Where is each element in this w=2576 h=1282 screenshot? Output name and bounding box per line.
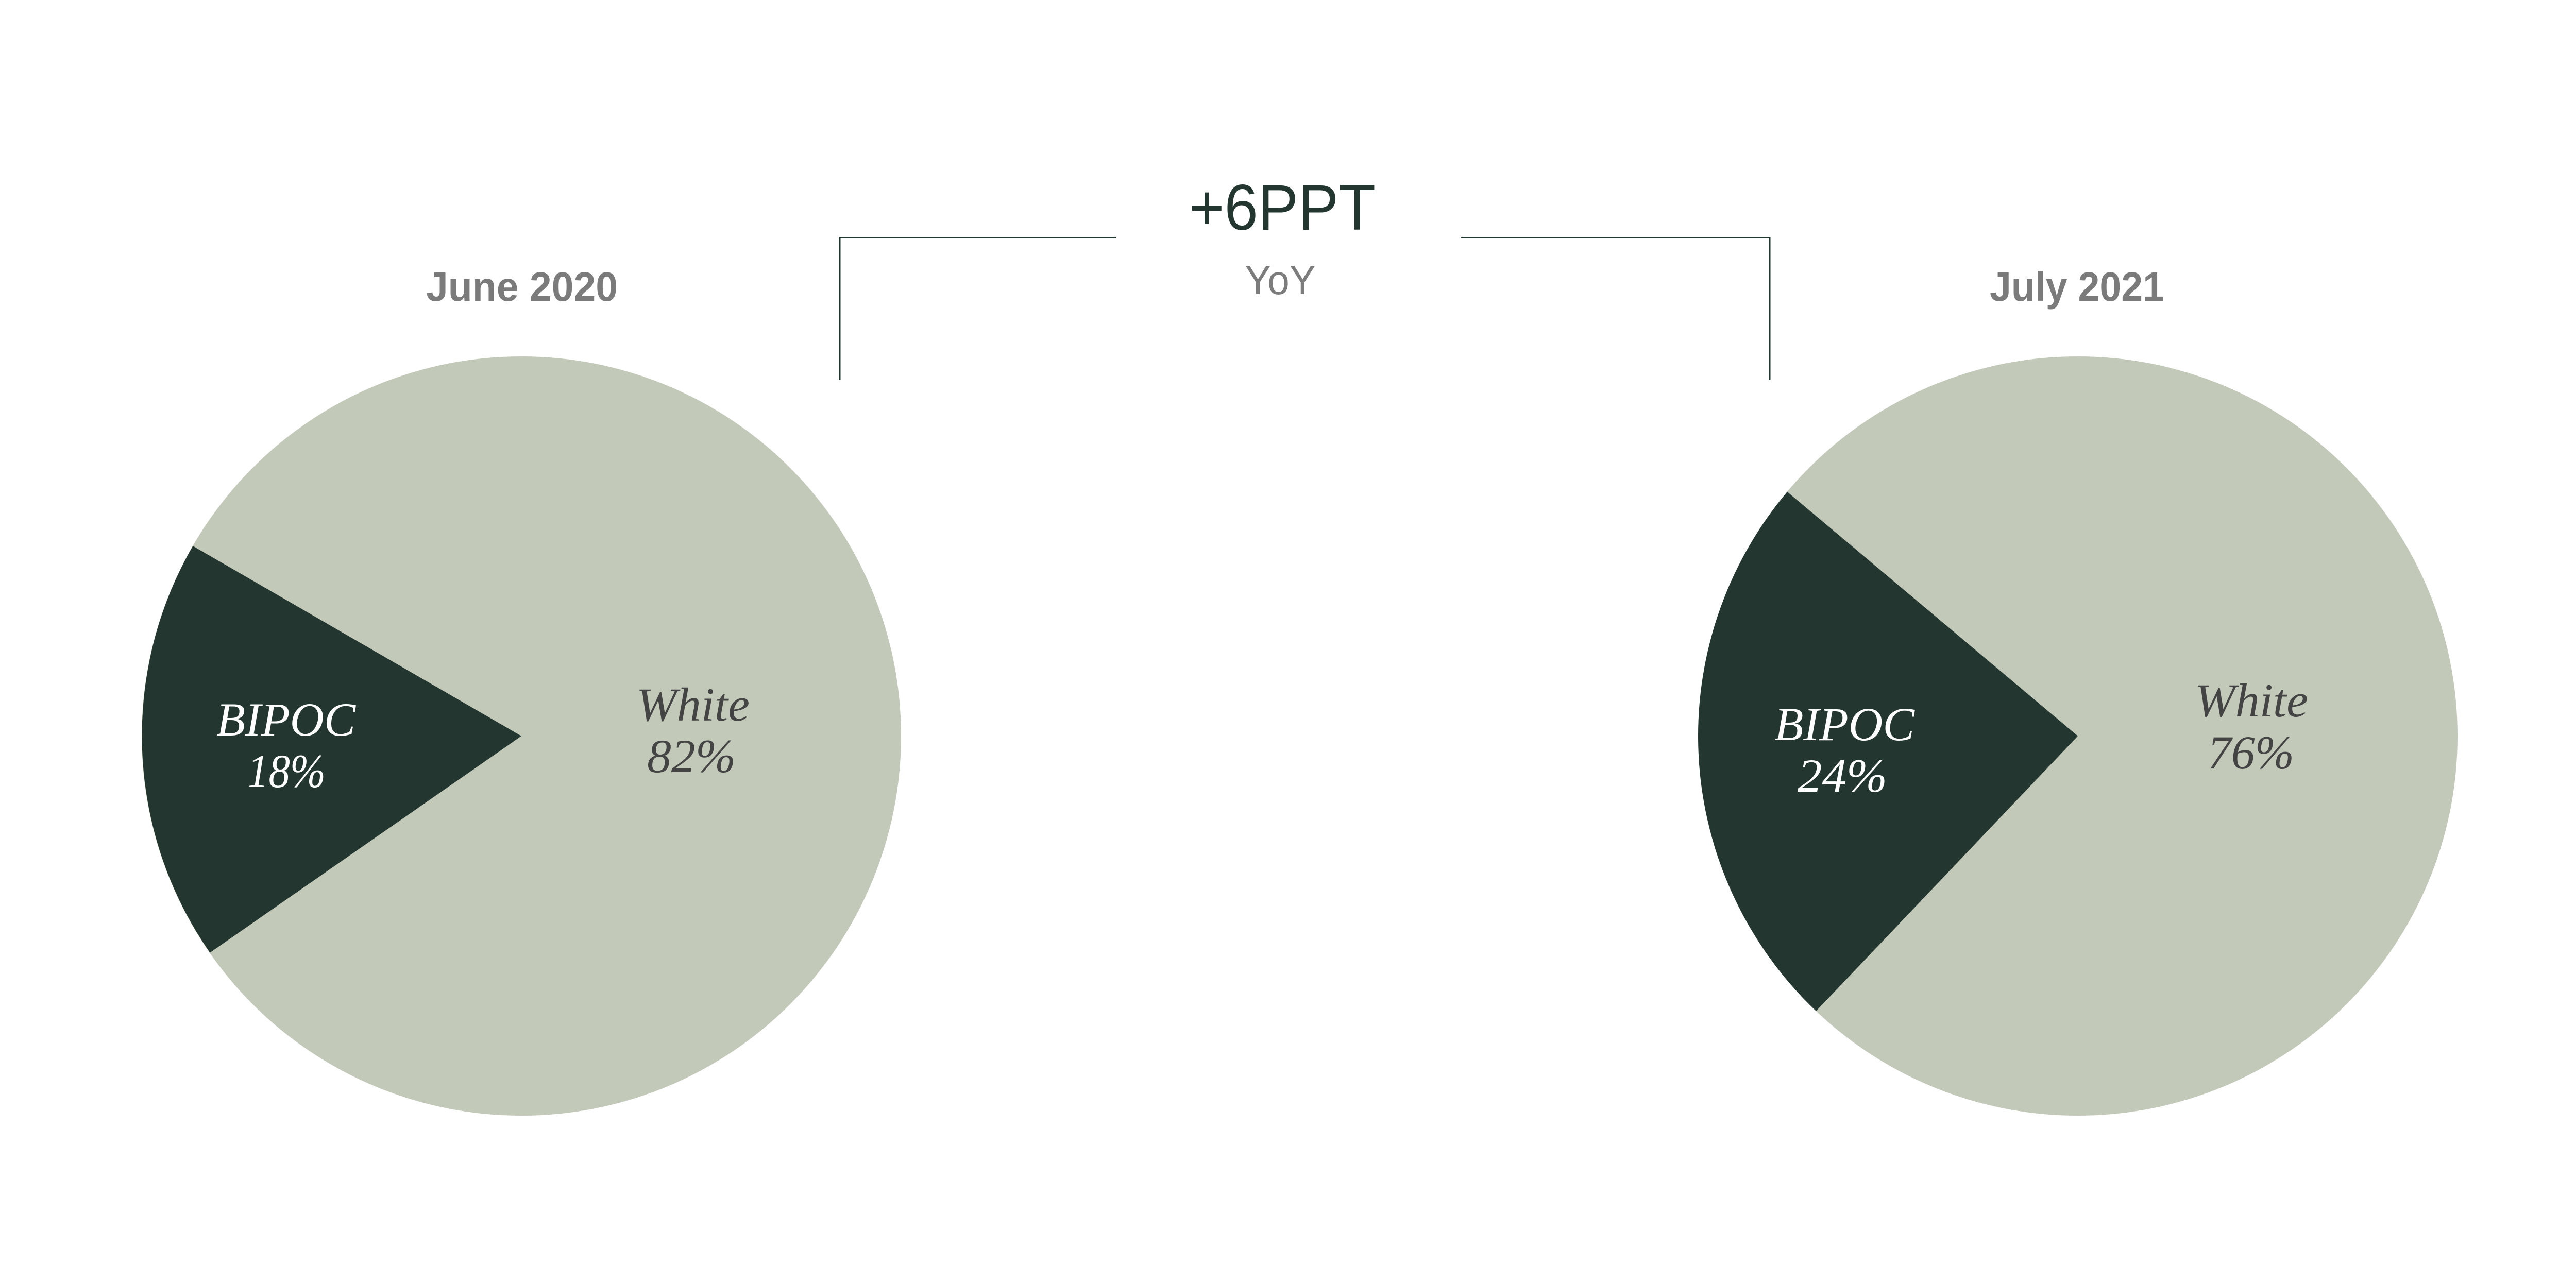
pie slice: White 82% <box>142 356 901 1116</box>
label: BIPOC 18% <box>216 693 357 797</box>
label: BIPOC 18%: BIPOC <box>216 693 357 746</box>
label: White 82% <box>636 678 750 782</box>
label: BIPOC 18%: 18% <box>247 745 326 797</box>
heading: June 2020: June 2020 <box>426 264 618 310</box>
heading: July 2021: July 2021 <box>1990 264 2164 310</box>
callout: year-over-year change <box>840 172 1770 380</box>
bracket: connects both pies <box>840 238 1770 380</box>
pie slice: BIPOC 18% <box>142 546 521 953</box>
label: White 76%: 76% <box>2208 726 2294 779</box>
text: YoY: YoY <box>1245 257 1316 303</box>
pie slice: White 76% <box>1698 356 2458 1116</box>
value: +6PPT: +6PPT <box>1189 172 1376 244</box>
label: BIPOC 24% <box>1774 698 1916 802</box>
pie chart: July 2021 <box>1698 356 2458 1116</box>
label: BIPOC 24%: 24% <box>1798 749 1887 802</box>
label: White 76%: White <box>2195 674 2308 727</box>
label: BIPOC 24%: BIPOC <box>1774 698 1916 750</box>
label: White 76% <box>2195 674 2308 779</box>
label: White 82%: 82% <box>647 730 736 782</box>
pie chart: June 2020 <box>142 356 901 1116</box>
panel: June 2020 <box>142 264 901 1116</box>
pie slice: BIPOC 24% <box>1698 492 2078 1011</box>
panel: July 2021 <box>1698 264 2458 1116</box>
label: White 82%: White <box>636 678 750 731</box>
